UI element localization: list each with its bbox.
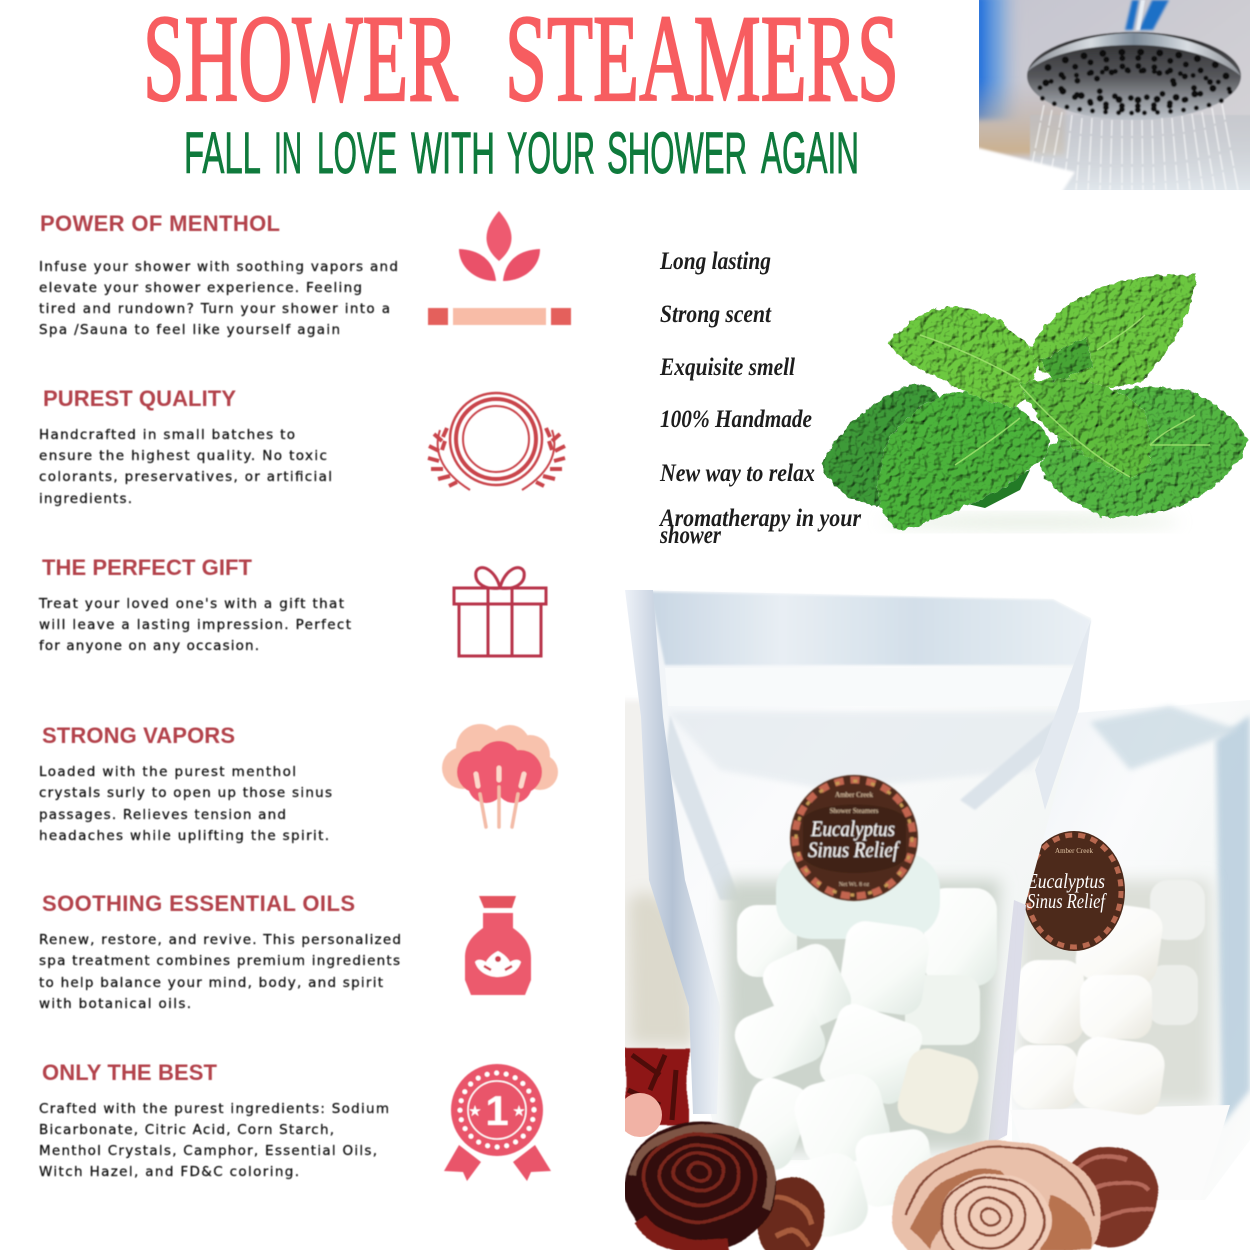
text block: benefits list: shower [659,522,721,549]
text block: benefits list: Exquisite smell [659,354,795,381]
label: front bag: Sinus Relief [808,837,900,862]
text block: colorants, preservatives, or artificial [39,469,332,485]
photo: product bags with shower steamers [618,590,1250,1250]
label: back bag: Eucalyptus [1026,869,1105,893]
label: front bag: Shower Steamers [830,807,879,815]
subtitle: SHOWER [607,121,747,186]
text block: Menthol Crystals, Camphor, Essential Oils, [39,1143,377,1159]
panel: power of menthol [39,211,571,338]
text block: benefits list: Aromatherapy in your [658,505,861,532]
text block: Bicarbonate, Citric Acid, Corn Starch, [39,1122,334,1138]
subtitle: LOVE [317,121,397,186]
text block [39,259,398,338]
text block: Handcrafted in small batches to [39,427,295,443]
text block: crystals surly to open up those sinus [39,785,332,801]
icon: number one medal: 1 [485,1087,509,1134]
heading: STRONG VAPORS [42,723,235,748]
panel: soothing essential oils [39,891,531,1012]
text block [38,596,351,654]
subtitle: FALL [184,121,261,186]
text block [39,1101,389,1180]
back bag [1012,704,1250,1128]
text block: benefits list: Strong scent [660,301,772,328]
label: back bag: Sinus Relief [1027,889,1107,913]
text block: tired and rundown? Turn your shower into a [39,301,390,317]
text block: with botanical oils. [39,996,191,1012]
text block [39,427,332,507]
label: front bag: Amber Creek [835,791,873,799]
text block: will leave a lasting impression. Perfect [39,617,351,633]
heading: POWER OF MENTHOL [40,211,280,236]
icon: number one medal: ★ [468,1102,482,1120]
heading: PUREST QUALITY [43,386,236,411]
subtitle: YOUR [507,121,595,186]
icon: number one medal: ★ [512,1102,526,1120]
label: back bag: Amber Creek [1055,847,1093,855]
panel: the perfect gift [38,555,546,656]
panel: only the best [39,1060,551,1181]
heading: SOOTHING ESSENTIAL OILS [42,891,355,916]
panel: strong vapors [39,723,558,844]
text block: Crafted with the purest ingredients: Sodium [39,1101,389,1117]
icon: gift box [454,568,546,656]
label: front bag: Net Wt. 8 oz [839,882,870,888]
text block: benefits list: New way to relax [659,460,815,487]
photo: mint leaves [822,275,1247,530]
text block: elevate your shower experience. Feeling [39,280,362,296]
subtitle: IN [274,121,302,186]
text block: benefits list: Long lasting [659,248,771,275]
flowers [618,1048,1158,1250]
text block: benefits list [658,248,861,549]
heading: THE PERFECT GIFT [42,555,253,580]
subtitle: WITH [411,121,495,186]
icon: vapor sticks [442,724,558,827]
label: front bag [790,775,918,901]
text block: Loaded with the purest menthol [39,764,296,780]
icon: number one medal [444,1064,551,1181]
text block: Treat your loved one's with a gift that [38,596,344,612]
text block: Spa /Sauna to feel like yourself again [39,322,340,338]
subtitle [184,121,859,186]
text block: to help balance your mind, body, and spirit [39,975,383,991]
text block: for anyone on any occasion. [39,638,259,654]
text block: Infuse your shower with soothing vapors and [39,259,398,275]
text block [39,932,401,1012]
subtitle: AGAIN [761,121,859,186]
icon: oil bottle [465,896,531,995]
icon: laurel ring [428,393,565,490]
text block: Renew, restore, and revive. This personalized [39,932,401,948]
front bag [625,590,1091,1242]
text block: headaches while uplifting the spirit. [39,828,329,844]
text block: passages. Relieves tension and [39,807,286,823]
panel: purest quality [39,386,565,507]
label: back bag [1023,831,1125,951]
title [143,0,899,127]
text block: Witch Hazel, and FD&C coloring. [39,1164,299,1180]
text block: ingredients. [39,491,132,507]
photo: shower head [975,0,1250,195]
heading: ONLY THE BEST [42,1060,218,1085]
text block [39,764,332,844]
text block: ensure the highest quality. No toxic [39,448,327,464]
label: front bag: Eucalyptus [810,816,895,841]
text block: spa treatment combines premium ingredients [39,953,400,969]
icon: menthol leaves [428,211,571,325]
text block: benefits list: 100% Handmade [660,406,812,433]
